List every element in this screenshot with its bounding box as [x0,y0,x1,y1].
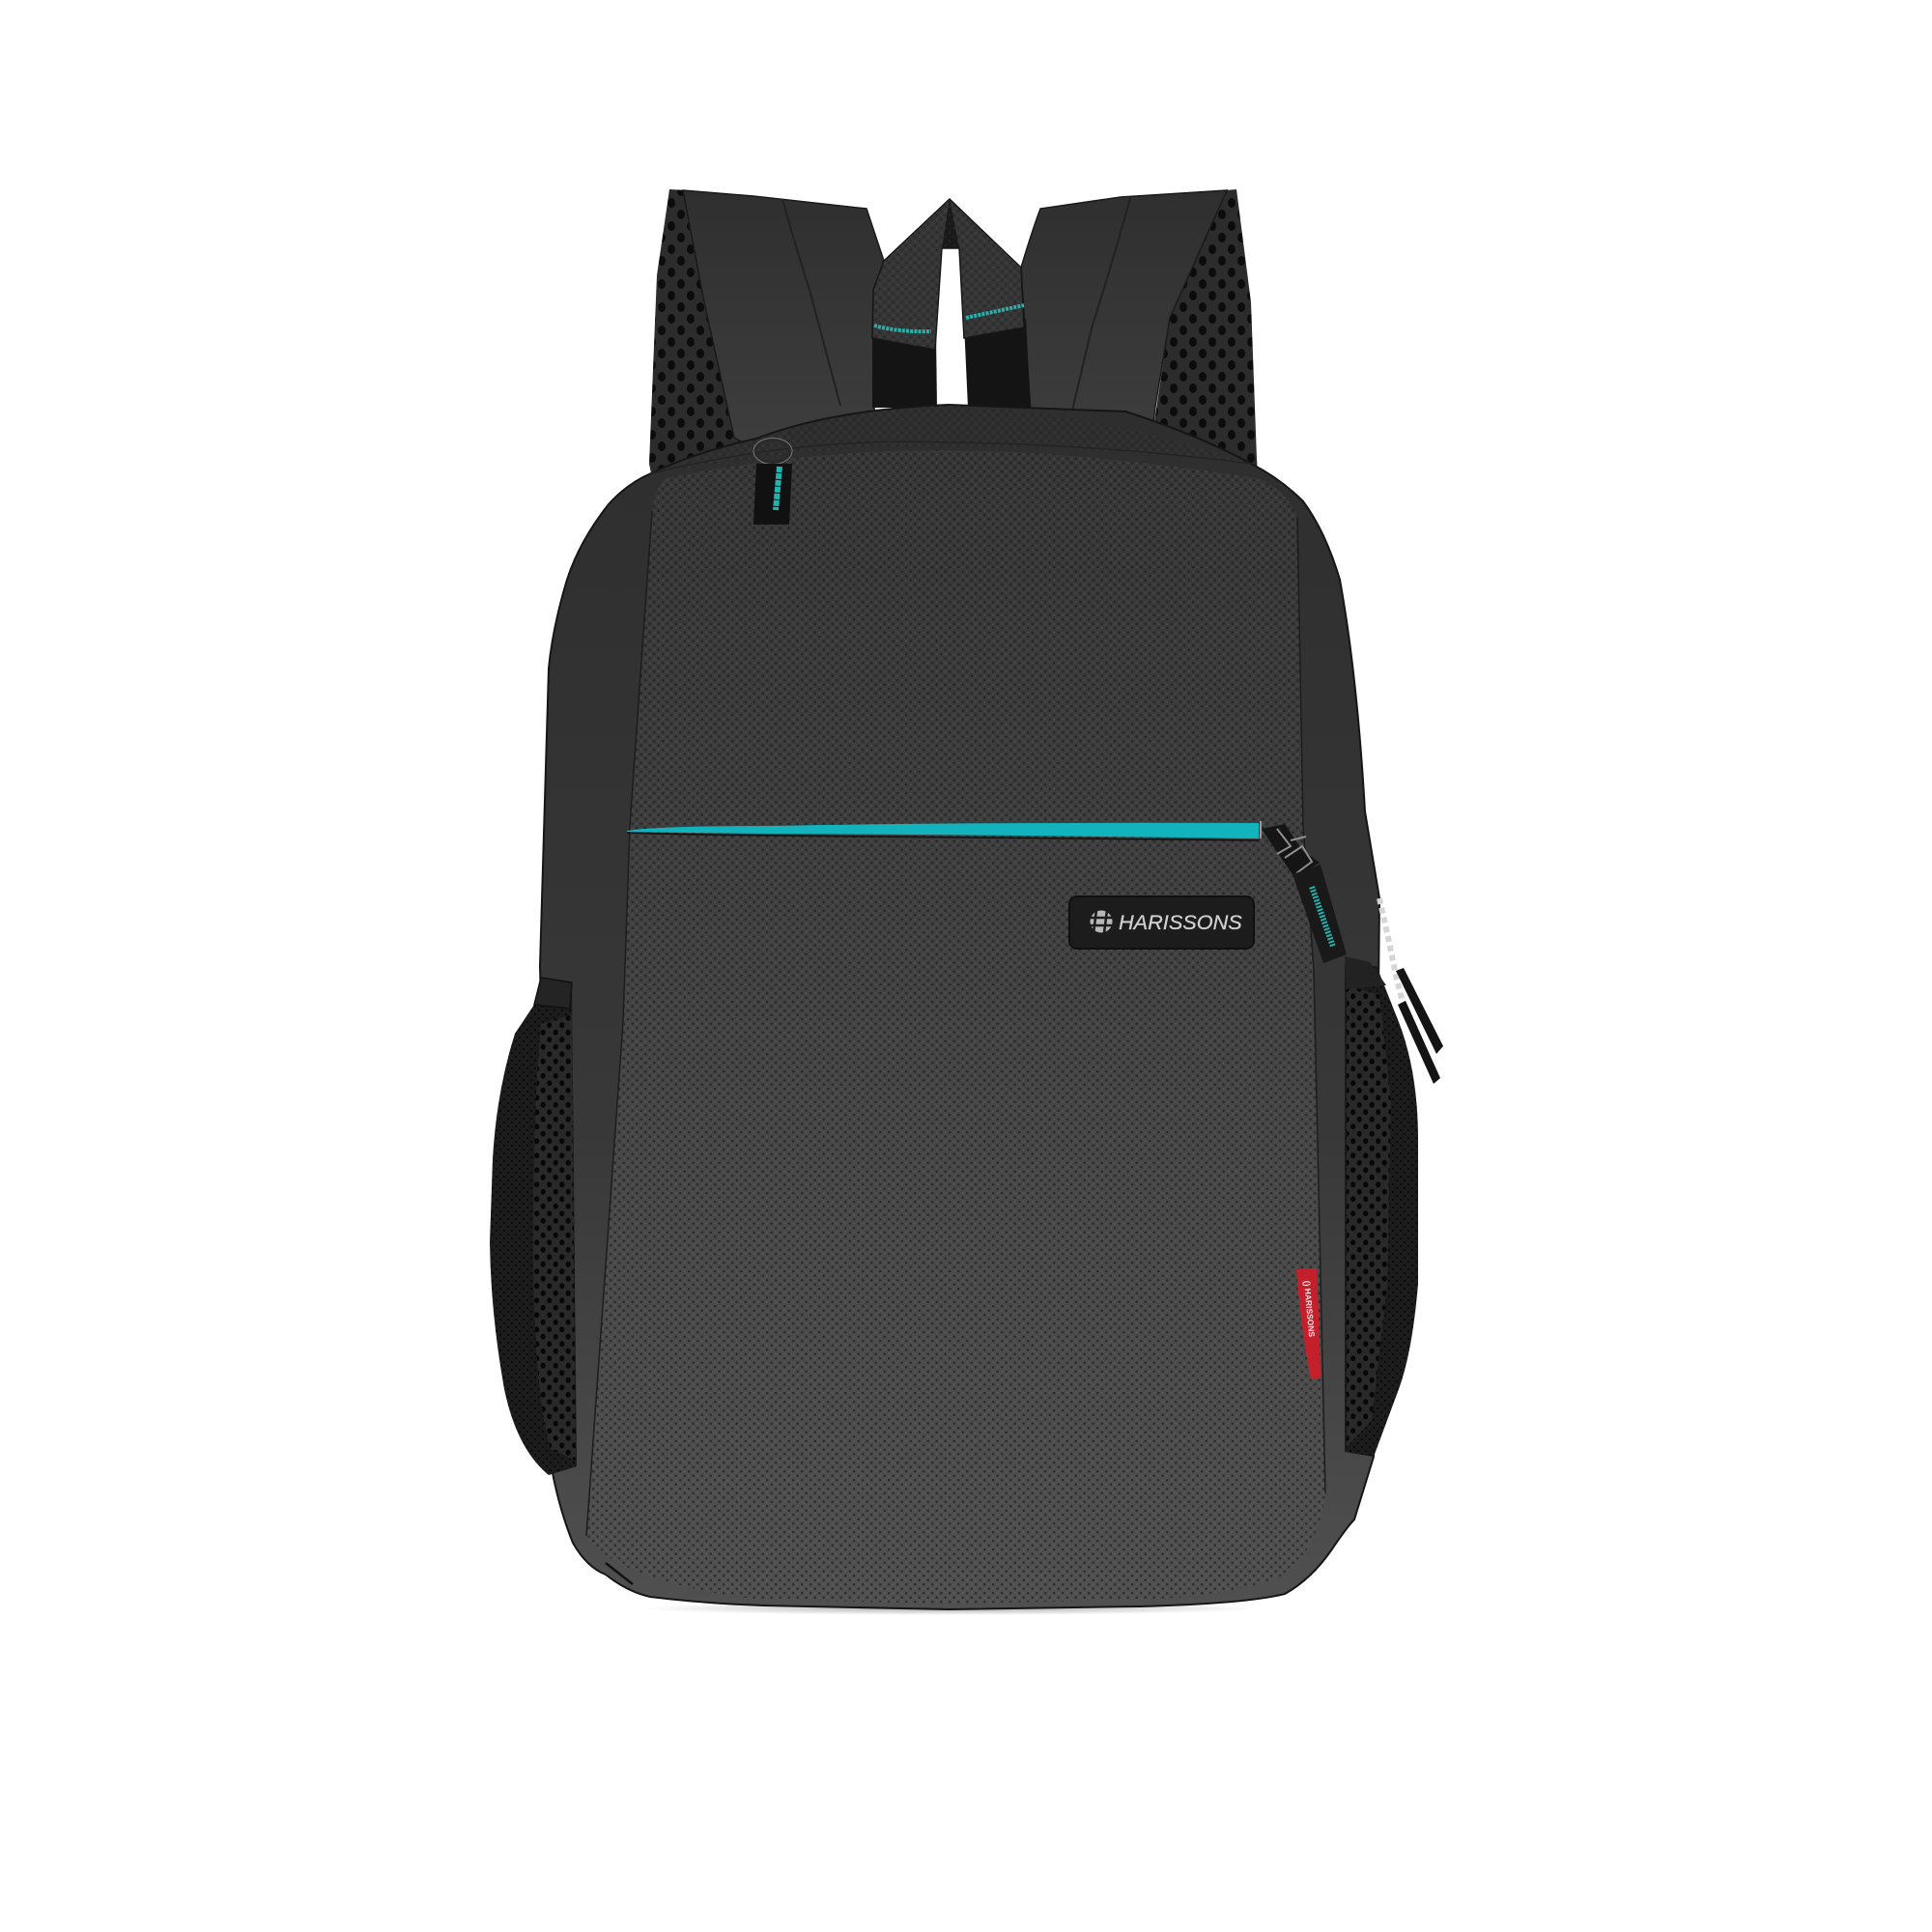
handle webbing right [964,319,1031,411]
strap seams [782,198,1130,411]
red side label [1296,1268,1321,1379]
front zipper puller [1261,821,1347,963]
badge brand name: HARISSONS [1119,910,1242,934]
right pocket binding [1345,956,1386,989]
teal front zipper [627,823,1259,838]
top handle [872,199,1031,411]
puller stitching [1312,887,1333,947]
badge logo [1090,910,1113,933]
left strap mesh [649,189,744,483]
right strap [1021,190,1227,454]
left mesh pocket [490,978,577,1475]
fabric dot texture [586,450,1325,1604]
side zipper teeth and pull tabs [1379,898,1443,1084]
right strap mesh [1150,189,1258,473]
puller metal slider [1277,829,1312,873]
handle stitching [874,305,1024,331]
left strap [683,190,884,454]
top zipper pull [753,439,792,525]
brand badge [1069,896,1254,949]
left pocket binding [534,978,572,1009]
front panel [586,450,1325,1604]
right mesh pocket [1345,956,1418,1457]
backpack illustration [490,189,1443,1609]
handle webbing left [872,333,937,408]
top gusset band texture [657,405,1251,473]
red label brand text: () HARISSONS [1302,1280,1317,1338]
top pull stitching [776,467,780,510]
zipper edge [627,833,1259,840]
ground shadow [642,1602,1261,1615]
panel seams [586,441,1325,1584]
main body [540,405,1379,1609]
shoulder straps and back padding [649,189,1258,483]
